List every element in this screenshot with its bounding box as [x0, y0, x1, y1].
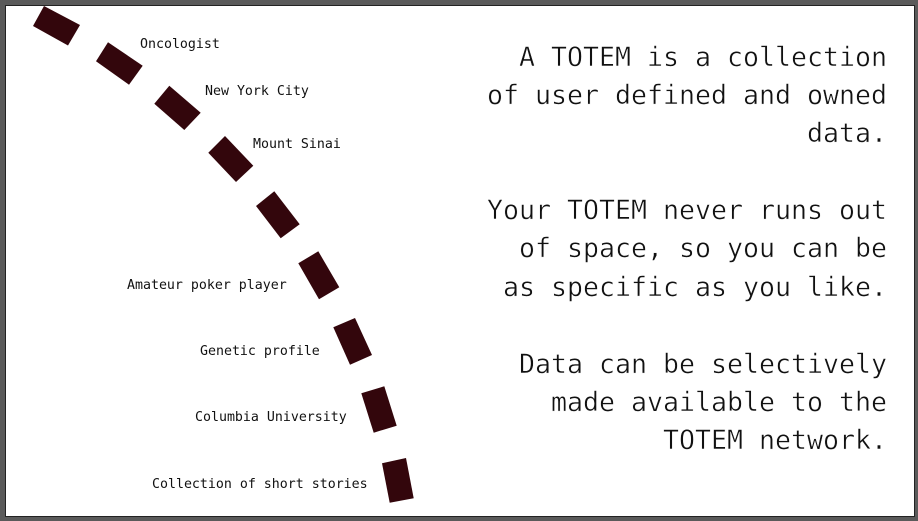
label: New York City: New York City — [205, 84, 309, 99]
text block: TOTEM definition: A TOTEM is a collection of user defined and owned data. — [487, 42, 887, 149]
label: Oncologist: Oncologist — [140, 37, 220, 52]
text block: selectively available data: Data can be selectively made available to the TOTEM network. — [519, 349, 887, 456]
text block: never runs out of space: Your TOTEM never runs out of space, so you can be as specific as you like. — [487, 195, 887, 303]
label: Amateur poker player: Amateur poker player — [127, 278, 287, 293]
label: Collection of short stories: Collection of short stories — [152, 477, 368, 492]
label: Genetic profile: Genetic profile — [200, 344, 320, 359]
label: Columbia University: Columbia University — [195, 410, 347, 425]
label: Mount Sinai: Mount Sinai — [253, 137, 341, 152]
